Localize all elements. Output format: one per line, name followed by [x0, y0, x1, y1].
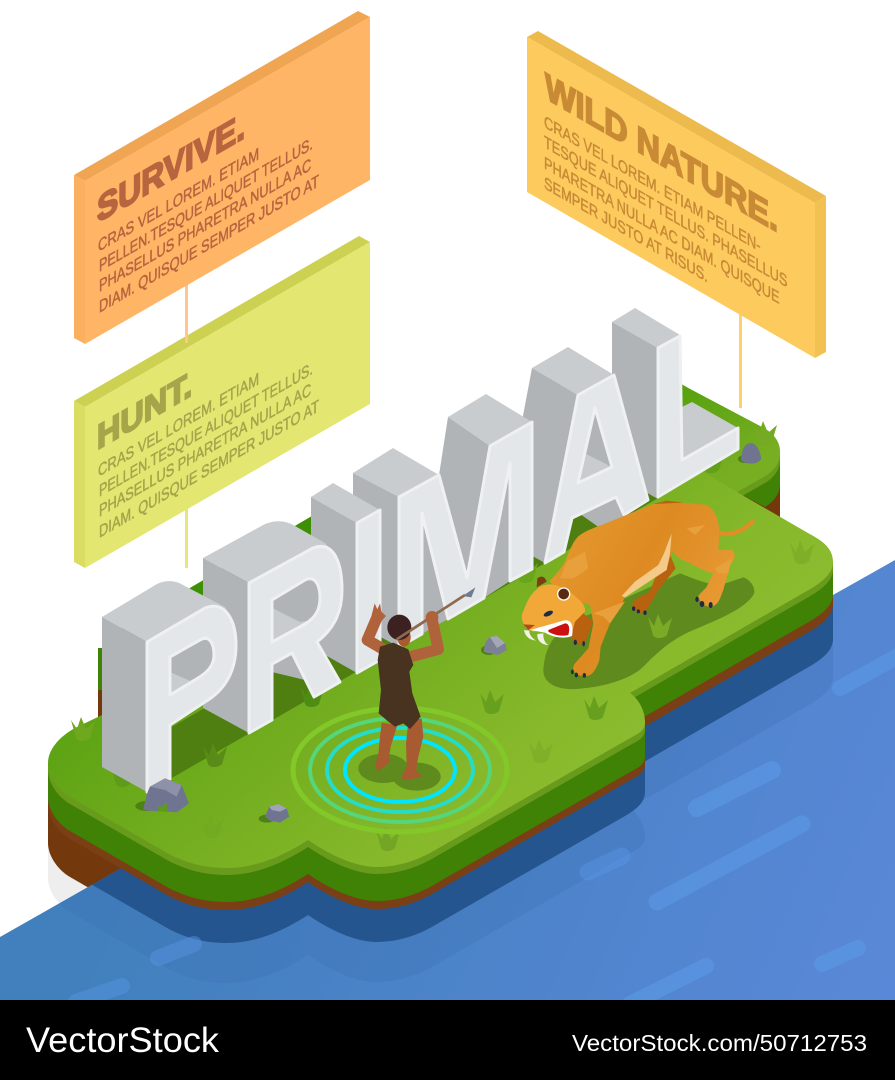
target rings around hunter [293, 708, 507, 832]
rear grass, dark back-left strip [112, 516, 312, 680]
back ridge [653, 501, 683, 504]
second ear [557, 587, 570, 601]
claws [571, 597, 713, 678]
footer bar [0, 1000, 895, 1080]
text block: hunt: CRAS VEL LOREM. ETIAM [98, 369, 259, 481]
rock: small front rock [259, 804, 289, 823]
text block: survive: PHASELLUS PHARETRA NULLA AC [99, 154, 311, 296]
panel: survive [74, 11, 370, 344]
belly stripe [622, 533, 672, 597]
panel: hunt [74, 236, 370, 568]
letter A [500, 347, 648, 563]
hunter legs [375, 718, 423, 781]
panel: wild nature [527, 31, 826, 358]
text block: wild nature: TESQUE ALIQUET TELLUS. PHASELLUS [544, 132, 787, 292]
tiger ground shadow [543, 573, 754, 689]
heading: wild nature: WILD NATURE. [545, 65, 778, 241]
text block: wild nature: SEMPER JUSTO AT RISUS. [544, 173, 708, 287]
island reflection on water [60, 643, 833, 903]
letter L [612, 308, 738, 499]
rear block left side soil [98, 648, 106, 720]
letter P [102, 581, 236, 792]
pole: wild nature [739, 310, 742, 408]
letter R [203, 521, 342, 733]
rock: big front rock [135, 778, 189, 812]
grass tufts [71, 421, 814, 851]
soil under the left corner [48, 763, 300, 950]
tiger body [549, 502, 735, 676]
grass top surface [48, 378, 833, 868]
far hind leg [632, 547, 676, 614]
island green side [48, 562, 833, 902]
water streaks [76, 655, 895, 1004]
text block: survive: CRAS VEL LOREM. ETIAM [98, 144, 259, 256]
text block: survive: PELLEN.TESQUE ALIQUET TELLUS. [99, 133, 313, 276]
footer logo: VectorStock [26, 1021, 220, 1060]
heading: survive: SURVIVE. [97, 104, 245, 231]
text block: hunt: PHASELLUS PHARETRA NULLA AC [99, 379, 311, 521]
rock: back rock [738, 443, 761, 464]
tiger head [522, 584, 585, 633]
spear [397, 587, 475, 639]
rock: middle rock [481, 636, 507, 655]
letter M [353, 394, 532, 647]
rear grass, right end [670, 378, 780, 492]
fangs [524, 630, 548, 645]
tail [717, 522, 753, 534]
text block: wild nature: CRAS VEL LOREM. ETIAM PELLEN- [544, 112, 761, 256]
hunter figure [358, 587, 475, 791]
footer link: VectorStock.com/50712753 [572, 1030, 867, 1056]
island soil layer [48, 562, 833, 910]
spear near hand [397, 611, 438, 639]
sabre-tooth tiger [522, 501, 753, 678]
text block: hunt: DIAM. QUISQUE SEMPER JUSTO AT [99, 396, 319, 542]
hunter shadow [358, 754, 441, 791]
grass rim [48, 452, 833, 875]
hunter head [387, 615, 411, 647]
island shadow on white ground [48, 763, 300, 988]
letter I [311, 483, 380, 673]
nose [523, 624, 535, 630]
pole: survive [185, 280, 188, 343]
rear right block side [700, 450, 780, 535]
hunter hand [372, 603, 386, 623]
submerged island base [92, 605, 833, 943]
fur patches [560, 525, 732, 623]
hunter tunic [378, 643, 421, 729]
text block: survive: DIAM. QUISQUE SEMPER JUSTO AT [99, 171, 319, 317]
ear [537, 577, 547, 587]
ground shadow of letters [170, 446, 660, 779]
mouth [530, 620, 573, 638]
water [0, 560, 895, 1000]
text block: hunt: PELLEN.TESQUE ALIQUET TELLUS. [99, 358, 313, 501]
hunter arms [367, 617, 438, 657]
heading: hunt: HUNT. [97, 364, 192, 458]
text block: wild nature: PHARETRA NULLA AC DIAM. QUISQUE [544, 153, 780, 308]
far front leg [572, 605, 593, 645]
pole: hunt [185, 505, 188, 568]
eye [543, 609, 554, 618]
